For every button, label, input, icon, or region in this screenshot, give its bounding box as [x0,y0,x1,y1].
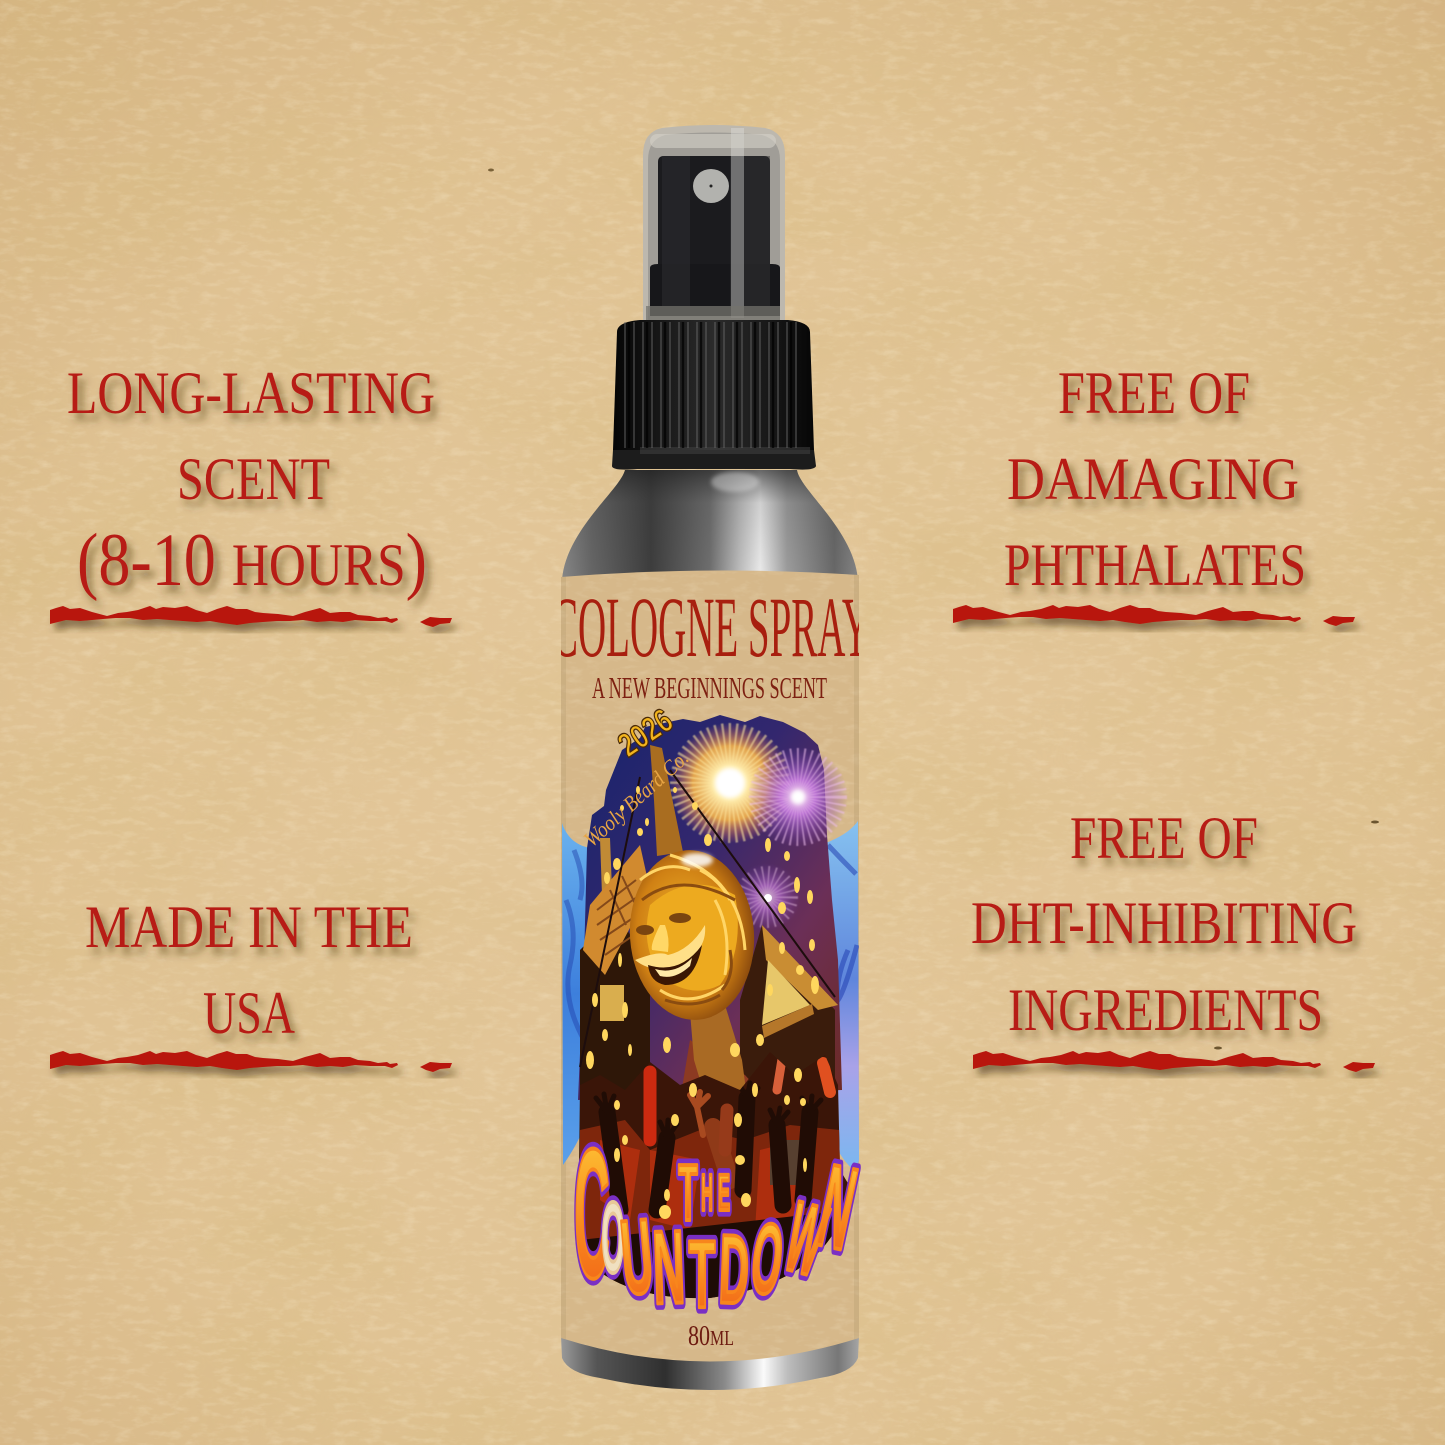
claim: long-lasting scent: LONG-LASTING [67,360,435,426]
label subheading: A NEW BEGINNINGS SCENT [592,670,827,705]
claim: made in the USA [85,894,413,1046]
clear overcap with nozzle [643,125,785,322]
title orange letters: N [809,1140,866,1275]
title orange letters: O [746,1203,788,1317]
title purple outline: N [651,1209,687,1326]
claim: free of DHT-inhibiting ingredients: DHT-INHIBITING [971,890,1357,956]
blue ink ribbons [562,821,859,1172]
text: COLOGNE SPRAY [552,579,870,675]
title purple outline: N [809,1140,866,1275]
aluminium shoulder [562,470,858,580]
torn underline: long-lasting [50,606,452,627]
moon face [630,850,754,1020]
title orange letters: O [601,1181,625,1294]
strings of lights [580,770,835,1067]
aluminium base [561,1336,859,1390]
title orange letters [574,1110,866,1328]
title orange letters: T [678,1148,698,1237]
year badge 2026: 2026 [612,702,680,765]
left house [580,838,650,1100]
claim: free of damaging phthalates: FREE OF [1058,360,1250,426]
right house [682,925,838,1084]
night sky [578,715,842,1100]
firework: purple [748,747,848,847]
claim: free of DHT-inhibiting ingredients: INGREDIENTS [1008,977,1323,1043]
title purple outline: W [775,1180,837,1297]
title purple outline: T [678,1148,698,1237]
label artwork [562,715,860,1305]
title orange letters: U [617,1197,657,1318]
claim: long-lasting scent: SCENT [177,446,330,512]
title purple outline: O [746,1203,788,1317]
firework: small [740,866,799,929]
ribbed black collar [612,320,816,470]
brand script text: Wooly Beard Co. [579,745,693,852]
spray bottle [561,125,859,1390]
title orange letters: E [718,1165,730,1222]
claim: free of DHT-inhibiting ingredients: FREE OF [1070,805,1258,871]
label texture [561,565,859,1385]
title purple outline: D [717,1214,751,1324]
claim: free of damaging phthalates: DAMAGING [1007,446,1299,512]
claim: free of damaging phthalates [1004,360,1306,598]
title purple outline: U [617,1197,657,1318]
title purple outline: E [718,1165,730,1222]
title orange letters: H [701,1166,713,1222]
claim: made in the USA: USA [203,980,295,1046]
torn underline: made in USA [50,1051,452,1072]
product title: The Countdown [574,1110,866,1328]
celebrating crowd [579,1057,848,1298]
raised arms dark [596,1083,821,1210]
title orange letters: W [775,1180,837,1297]
title orange letters: T [689,1220,715,1328]
title purple outline: C [574,1110,610,1317]
title purple outline: O [601,1181,625,1294]
volume 80ml: 80ML [688,1320,734,1352]
claim: long-lasting scent: (8-10 HOURS) [77,519,427,602]
claim: free of damaging phthalates: PHTHALATES [1004,532,1306,598]
title purple outline [574,1110,866,1328]
golden confetti [586,786,819,1219]
title purple outline: T [689,1220,715,1328]
torn underline: phthalates [953,605,1355,626]
claim: made in the USA: MADE IN THE [85,894,413,960]
title orange letters: C [574,1110,610,1317]
paper label [561,570,859,1362]
title orange letters: D [717,1214,751,1324]
title orange letters: N [651,1209,687,1326]
claim: long-lasting scent [67,360,435,602]
claim: free of DHT-inhibiting ingredients [971,805,1357,1043]
title purple outline: H [701,1166,713,1222]
firework: yellow [670,723,790,843]
wooden stem [690,1008,745,1090]
raised arms red [650,1053,830,1180]
clock-tower spire [650,745,683,856]
torn underline: ingredients [973,1051,1375,1072]
